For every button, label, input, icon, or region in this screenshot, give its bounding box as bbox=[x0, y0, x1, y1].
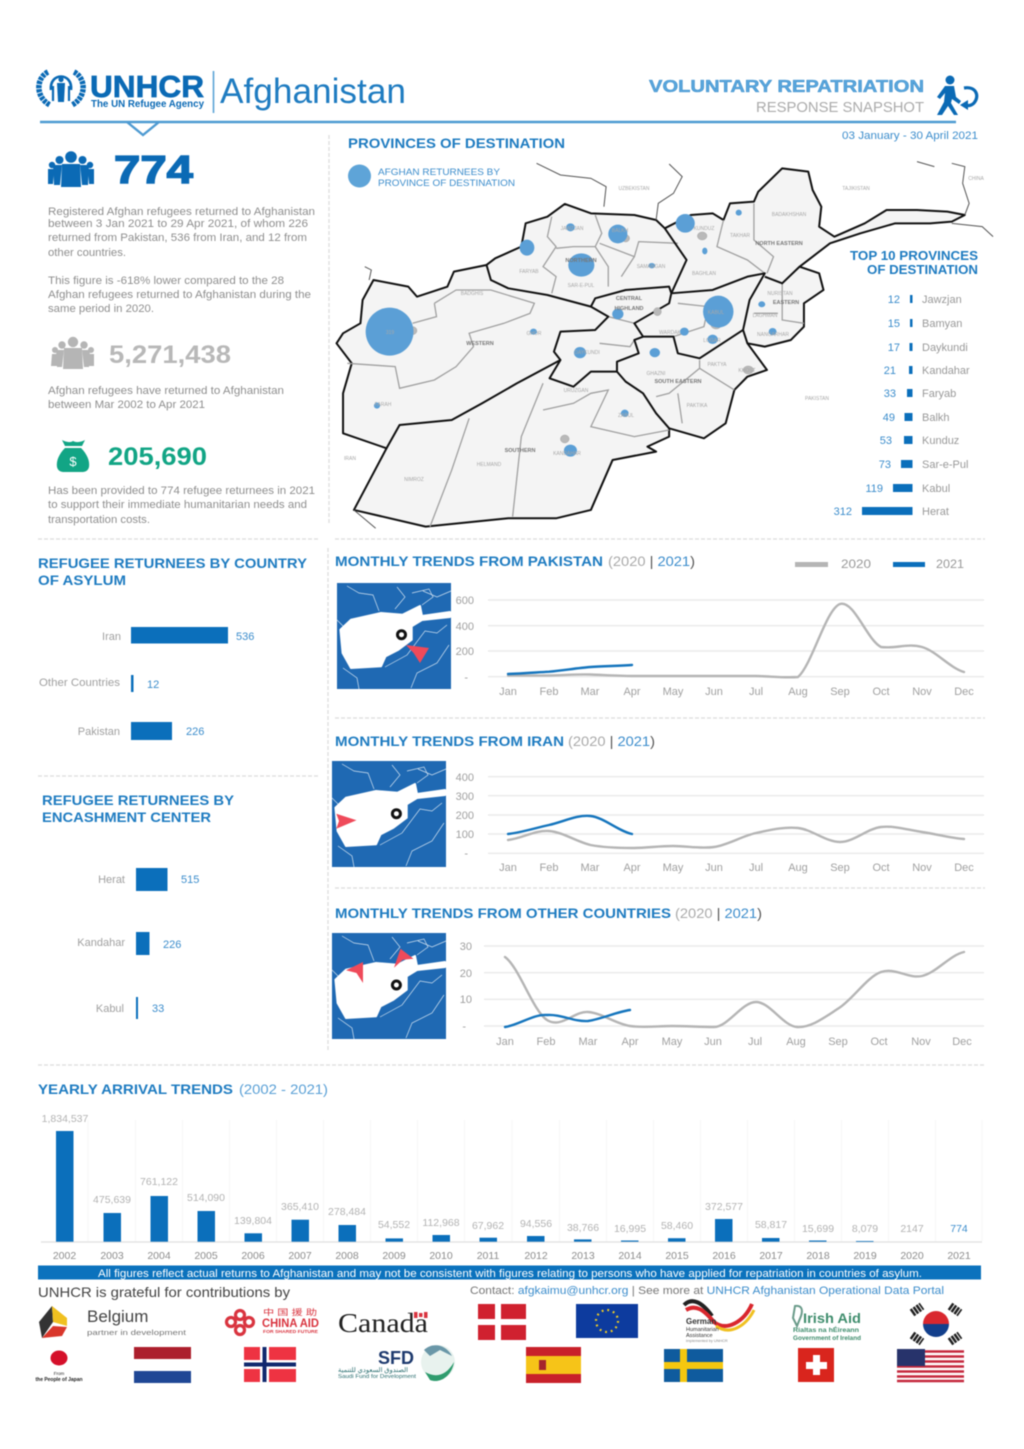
bar: Kandahar: Kandahar bbox=[77, 937, 125, 949]
heading: yearly arrival trends bbox=[38, 1081, 328, 1097]
line chart: other countries: 30 bbox=[460, 941, 472, 953]
icon: money bag: $ bbox=[69, 454, 77, 469]
line chart: Iran: Apr bbox=[623, 862, 641, 874]
logo wordmark: UNHCR bbox=[90, 69, 204, 104]
line chart: Iran: Feb bbox=[540, 862, 558, 874]
line chart: Iran: - bbox=[464, 848, 468, 860]
bar: Herat bbox=[98, 868, 199, 891]
line chart: other countries: Aug bbox=[786, 1036, 806, 1048]
line chart: Iran: 400 bbox=[456, 772, 474, 784]
bars: top 10 provinces: Sar-e-Pul bbox=[922, 459, 968, 471]
line chart: other countries: May bbox=[662, 1036, 683, 1048]
bars: top 10 provinces: Jawzjan bbox=[922, 294, 962, 306]
icon: group of people blue bbox=[48, 151, 94, 187]
map labels: NORTH EASTERN bbox=[755, 241, 803, 247]
logo: China Aid bbox=[226, 1307, 319, 1334]
panel: provinces of destination map bbox=[337, 135, 993, 528]
map legend: PROVINCE OF DESTINATION bbox=[378, 178, 515, 189]
text block: cash grant: to support their immediate humanitarian needs and bbox=[48, 499, 307, 511]
contributions heading: UNHCR is grateful for contributions by bbox=[38, 1284, 290, 1300]
logo: Saudi Fund for Development: SFD bbox=[378, 1348, 414, 1368]
logo: Saudi Fund for Development: Saudi Fund for Development bbox=[338, 1374, 417, 1380]
bar: Kabul: Kabul bbox=[96, 1003, 124, 1015]
text block: total returnees: Afghan refugees have returned to Afghanistan bbox=[48, 385, 284, 397]
map labels: ZABUL bbox=[618, 413, 634, 419]
logo: German Humanitarian Assistance bbox=[684, 1301, 754, 1343]
bubbles: returnees by province bbox=[366, 210, 777, 457]
text block: cash grant: Has been provided to 774 refugee returnees in 2021 bbox=[48, 485, 315, 497]
line chart: Pakistan: Oct bbox=[872, 686, 890, 698]
icon: walking person with return arrow bbox=[937, 76, 977, 115]
bar chart: yearly arrivals: 2017 bbox=[759, 1250, 783, 1262]
map labels: KHOST bbox=[738, 368, 756, 374]
bars: top 10 provinces: 119 bbox=[865, 483, 883, 495]
bars: top 10 provinces: 21 bbox=[884, 365, 896, 377]
map labels: IRAN bbox=[344, 456, 356, 462]
line chart: other countries: Jun bbox=[704, 1036, 722, 1048]
flag: Switzerland bbox=[798, 1348, 834, 1382]
bar chart: yearly arrivals: 2009 bbox=[382, 1250, 406, 1262]
bar chart: yearly arrivals: 2008 bbox=[335, 1250, 359, 1262]
line chart: Pakistan bbox=[456, 595, 984, 698]
map labels: FARAH bbox=[375, 402, 392, 408]
panel: yearly arrival trends bbox=[38, 1081, 982, 1262]
logo: Irish Aid: Rialtas na hÉireann bbox=[793, 1326, 859, 1334]
map labels: BADGHIS bbox=[461, 291, 484, 297]
panel: key figures bbox=[48, 149, 315, 526]
line chart: Pakistan: Feb bbox=[540, 686, 558, 698]
bar chart: yearly arrivals: 365,410 bbox=[281, 1201, 319, 1213]
bar chart: yearly arrivals: 514,090 bbox=[187, 1192, 225, 1204]
bar chart: yearly arrivals: 112,968 bbox=[422, 1217, 460, 1229]
bars: top 10 provinces: Kandahar bbox=[922, 365, 970, 377]
logo: Japan: From bbox=[54, 1371, 64, 1376]
locator map: Iran bbox=[332, 761, 446, 867]
header rule with chevron bbox=[40, 122, 956, 135]
line chart: other countries: Jan bbox=[496, 1036, 514, 1048]
flag: United States bbox=[897, 1349, 964, 1382]
logo: Saudi Fund for Development bbox=[338, 1345, 455, 1381]
bar: Iran bbox=[102, 627, 254, 644]
bar chart: yearly arrivals: 475,639 bbox=[93, 1194, 131, 1206]
logo: German Humanitarian Assistance: Assistance bbox=[686, 1333, 713, 1339]
bar chart: yearly arrivals: 139,804 bbox=[234, 1215, 272, 1227]
map labels: HELMAND bbox=[477, 462, 502, 468]
bar: other countries: 12 bbox=[147, 679, 159, 691]
map labels: GHAZNI bbox=[647, 371, 665, 377]
logo: Irish Aid: Government of Ireland bbox=[793, 1336, 861, 1342]
heading: country of asylum: OF ASYLUM bbox=[38, 572, 126, 588]
map labels: SAR-E-PUL bbox=[568, 283, 595, 289]
logo: Belgium: partner in development bbox=[87, 1328, 187, 1337]
heading: Pakistan trends bbox=[335, 553, 695, 569]
map labels: JAWZJAN bbox=[561, 226, 584, 232]
line chart: Iran: Jun bbox=[705, 862, 723, 874]
bars: top 10 provinces: Kabul bbox=[922, 483, 950, 495]
line chart: Iran: Jul bbox=[749, 862, 763, 874]
bar chart: yearly arrivals: 2016 bbox=[712, 1250, 736, 1262]
text block: cash grant: transportation costs. bbox=[48, 514, 150, 526]
line chart: Iran: Dec bbox=[954, 862, 974, 874]
map labels: WESTERN bbox=[466, 341, 494, 347]
map labels: BADAKHSHAN bbox=[772, 212, 807, 218]
bar chart: yearly arrivals: 2013 bbox=[571, 1250, 595, 1262]
bar chart: yearly arrivals: 774 bbox=[950, 1223, 968, 1235]
text block: total returnees: between Mar 2002 to Apr 2021 bbox=[48, 399, 205, 411]
panel: monthly trends from Pakistan bbox=[335, 553, 984, 698]
chart legend bbox=[795, 557, 964, 571]
locator map: other countries bbox=[332, 933, 446, 1039]
bar chart: yearly arrivals: 8,079 bbox=[852, 1223, 878, 1235]
bar chart: yearly arrivals: 16,995 bbox=[614, 1223, 646, 1235]
bar: Pakistan: 226 bbox=[186, 726, 204, 738]
logo: Japan bbox=[36, 1350, 82, 1383]
logo: China Aid: FOR SHARED FUTURE bbox=[263, 1329, 318, 1334]
map labels: BALKH bbox=[612, 228, 629, 234]
line chart: Pakistan: 600 bbox=[456, 595, 474, 607]
flag: Denmark bbox=[478, 1304, 526, 1340]
logo tagline: The UN Refugee Agency bbox=[91, 99, 204, 110]
map labels: LOGAR bbox=[703, 338, 721, 344]
line chart: Pakistan: - bbox=[464, 672, 468, 684]
heading: yearly arrival trends: YEARLY ARRIVAL TRENDS bbox=[38, 1081, 233, 1097]
bar chart: yearly arrivals: 2003 bbox=[100, 1250, 124, 1262]
line chart: Iran: Aug bbox=[788, 862, 808, 874]
bars: top 10 provinces: 49 bbox=[883, 412, 895, 424]
heading: other countries trends: (2020 | 2021) bbox=[675, 906, 762, 921]
map labels: NORTHERN bbox=[565, 258, 597, 264]
bar chart: yearly arrivals: 2019 bbox=[853, 1250, 877, 1262]
line chart: Iran: 200 bbox=[456, 810, 474, 822]
map legend bbox=[348, 164, 515, 189]
bars: top 10 provinces: 12 bbox=[888, 294, 900, 306]
map labels: KANDAHAR bbox=[553, 451, 581, 457]
bar chart: yearly arrivals: 94,556 bbox=[520, 1218, 552, 1230]
donor logos bbox=[36, 1301, 964, 1383]
icon: group of people grey bbox=[51, 337, 94, 369]
bars: top 10 provinces bbox=[834, 294, 970, 518]
logo: German Humanitarian Assistance: Humanitarian bbox=[686, 1327, 719, 1333]
bars: top 10 provinces: Kunduz bbox=[922, 435, 959, 447]
logo: Belgium bbox=[39, 1306, 187, 1338]
heading: country of asylum bbox=[38, 555, 308, 588]
map labels: PAKTYA bbox=[708, 362, 727, 368]
bar: Kandahar bbox=[77, 932, 181, 955]
logo: Irish Aid: Irish Aid bbox=[803, 1310, 861, 1326]
line chart: Iran: Oct bbox=[872, 862, 890, 874]
map legend: AFGHAN RETURNEES BY bbox=[378, 167, 501, 178]
disclaimer banner: All figures reflect actual returns to Afghanistan and may not be consistent with figures relating to persons who have applied for repatriation in countries of asylum. bbox=[98, 1268, 922, 1280]
text block: comparison: same period in 2020. bbox=[48, 303, 154, 315]
map labels: PAKTIKA bbox=[687, 403, 708, 409]
bar: Pakistan: Pakistan bbox=[78, 726, 120, 738]
line chart: Pakistan: Jan bbox=[499, 686, 517, 698]
panel: returnees by country of asylum bbox=[38, 555, 308, 740]
logo: Saudi Fund for Development: الصندوق السعودي للتنمية bbox=[338, 1366, 408, 1374]
bar: Pakistan bbox=[78, 722, 204, 740]
bars: top 10 provinces: 33 bbox=[884, 388, 896, 400]
map labels: HIGHLAND bbox=[614, 306, 644, 312]
locator map: Pakistan bbox=[337, 583, 451, 689]
heading: yearly arrival trends: (2002 - 2021) bbox=[239, 1082, 328, 1097]
line chart: Iran: Nov bbox=[912, 862, 932, 874]
text block: comparison bbox=[48, 275, 311, 315]
text block: cash grant bbox=[48, 485, 315, 526]
heading: country of asylum: REFUGEE RETURNEES BY COUNTRY bbox=[38, 555, 308, 571]
figure: 5,271,438: 5,271,438 bbox=[109, 341, 231, 369]
line chart: Iran bbox=[456, 772, 984, 874]
bar chart: yearly arrivals: 1,834,537 bbox=[42, 1113, 89, 1125]
panel: top 10 provinces bbox=[834, 248, 978, 518]
bar chart: yearly arrivals: 54,552 bbox=[378, 1219, 410, 1231]
line chart: Iran: 300 bbox=[456, 791, 474, 803]
bar chart: yearly arrivals: 15,699 bbox=[802, 1223, 834, 1235]
line chart: other countries: Oct bbox=[870, 1036, 888, 1048]
heading: Iran trends: (2020 | 2021) bbox=[568, 734, 655, 749]
line chart: Pakistan: Sep bbox=[830, 686, 850, 698]
map labels: PAKISTAN bbox=[805, 396, 829, 402]
line chart: Pakistan: 400 bbox=[456, 621, 474, 633]
flag: Spain bbox=[526, 1347, 581, 1383]
map labels: CHINA bbox=[968, 176, 984, 182]
bar: other countries bbox=[39, 675, 159, 692]
line chart: Pakistan: Dec bbox=[954, 686, 974, 698]
bars: top 10 provinces: Balkh bbox=[922, 412, 950, 424]
line chart: Iran: Mar bbox=[581, 862, 600, 874]
text block: registered returnees: returned from Pakistan, 536 from Iran, and 12 from bbox=[48, 232, 307, 244]
line chart: Pakistan: Mar bbox=[581, 686, 600, 698]
text block: comparison: Afghan refugees returned to Afghanistan during the bbox=[48, 289, 311, 301]
logo: Canada: Canada bbox=[338, 1308, 428, 1338]
panel: monthly trends from other countries bbox=[332, 905, 984, 1048]
bars: top 10 provinces: Faryab bbox=[922, 388, 956, 400]
map labels: KABUL bbox=[708, 310, 724, 316]
map labels: EASTERN bbox=[773, 300, 799, 306]
bar chart: yearly arrivals: 2002 bbox=[53, 1250, 76, 1262]
flag: Netherlands bbox=[134, 1347, 191, 1383]
country title: Afghanistan bbox=[220, 72, 406, 111]
logo: German Humanitarian Assistance: implemented by UNHCR bbox=[686, 1339, 728, 1343]
map labels: NANGARHAR bbox=[757, 332, 789, 338]
map labels: URUZGAN bbox=[564, 388, 589, 394]
text block: registered returnees: between 3 Jan 2021 to 29 Apr 2021, of whom 226 bbox=[48, 218, 308, 230]
line chart: Pakistan: May bbox=[663, 686, 684, 698]
logo: China Aid: CHINA AID bbox=[262, 1318, 319, 1330]
heading: encashment center: REFUGEE RETURNEES BY bbox=[42, 792, 235, 808]
line chart: Pakistan: Jun bbox=[705, 686, 723, 698]
report title: VOLUNTARY REPATRIATION bbox=[649, 76, 924, 96]
bar chart: yearly arrivals: 2007 bbox=[288, 1250, 312, 1262]
header: UNHCR logo and country title bbox=[39, 69, 406, 113]
logo: Belgium: Belgium bbox=[87, 1307, 148, 1326]
bars: top 10 provinces: 17 bbox=[888, 342, 900, 354]
map labels: BAGHLAN bbox=[692, 271, 716, 277]
heading: encashment center: ENCASHMENT CENTER bbox=[42, 809, 211, 825]
map labels: CENTRAL bbox=[616, 296, 643, 302]
map labels: SOUTH EASTERN bbox=[654, 379, 702, 385]
line chart: Pakistan: 200 bbox=[456, 646, 474, 658]
panel: returnees by encashment center bbox=[42, 792, 235, 1019]
text block: registered returnees: Registered Afghan refugees returned to Afghanistan bbox=[48, 206, 315, 218]
map labels: GHOR bbox=[526, 331, 542, 337]
bar chart: yearly arrivals: 38,766 bbox=[567, 1222, 599, 1234]
line chart: Pakistan: Nov bbox=[912, 686, 932, 698]
header: report type bbox=[649, 76, 977, 116]
line chart: Iran: May bbox=[663, 862, 684, 874]
text block: comparison: This figure is -618% lower compared to the 28 bbox=[48, 275, 284, 287]
flag: Sweden bbox=[664, 1349, 723, 1382]
report subtitle: RESPONSE SNAPSHOT bbox=[756, 99, 924, 116]
icon: money bag bbox=[57, 440, 89, 472]
line chart: Iran: Sep bbox=[830, 862, 850, 874]
chart legend: 2020 bbox=[841, 557, 871, 571]
bar chart: yearly arrivals: 2018 bbox=[806, 1250, 830, 1262]
line chart: other countries: Jul bbox=[748, 1036, 762, 1048]
map labels: NURISTAN bbox=[767, 291, 793, 297]
map labels: KUNDUZ bbox=[694, 226, 714, 232]
map labels: NIMROZ bbox=[404, 477, 424, 483]
bar: Kabul bbox=[96, 997, 164, 1019]
logo: Irish Aid bbox=[793, 1306, 861, 1342]
line chart: other countries: Mar bbox=[579, 1036, 598, 1048]
line chart: other countries: Feb bbox=[537, 1036, 555, 1048]
country shape bbox=[337, 168, 965, 527]
logo: China Aid: 中 国 援 助 bbox=[263, 1307, 317, 1317]
map labels: DAYKUNDI bbox=[574, 350, 600, 356]
map labels: SAMANGAN bbox=[637, 264, 666, 270]
line chart: Pakistan: Aug bbox=[788, 686, 808, 698]
heading: top 10 provinces: TOP 10 PROVINCES bbox=[850, 248, 978, 263]
line chart: other countries: - bbox=[462, 1021, 466, 1033]
bar: Herat: Herat bbox=[98, 874, 125, 886]
logo: Japan: the People of Japan bbox=[36, 1377, 82, 1383]
bar: other countries: Other Countries bbox=[39, 677, 121, 689]
map labels: 319 bbox=[386, 330, 394, 336]
logo: German Humanitarian Assistance: German bbox=[686, 1317, 716, 1326]
line chart: Pakistan: Apr bbox=[623, 686, 641, 698]
line chart: other countries: 20 bbox=[460, 968, 472, 980]
heading: Pakistan trends: (2020 | 2021) bbox=[608, 554, 695, 569]
bar chart: yearly arrivals: 67,962 bbox=[472, 1220, 504, 1232]
bar chart: yearly arrivals: 2014 bbox=[618, 1250, 642, 1262]
icon: UNHCR emblem bbox=[39, 72, 83, 105]
heading: top 10 provinces bbox=[850, 248, 978, 277]
bar: Iran: 536 bbox=[236, 631, 254, 643]
bar chart: yearly arrivals bbox=[41, 1113, 982, 1262]
bar chart: yearly arrivals: 2021 bbox=[947, 1250, 971, 1262]
map labels bbox=[344, 176, 984, 483]
flag: European Union bbox=[576, 1304, 638, 1338]
line chart: other countries: Sep bbox=[828, 1036, 848, 1048]
map labels: TAKHAR bbox=[730, 233, 750, 239]
text block: total returnees bbox=[48, 385, 284, 411]
bar chart: yearly arrivals: 2020 bbox=[900, 1250, 924, 1262]
bar: Kandahar: 226 bbox=[163, 939, 181, 951]
bars: top 10 provinces: Herat bbox=[922, 506, 949, 518]
map labels: TAJIKISTAN bbox=[842, 186, 870, 192]
line chart: Pakistan: Jul bbox=[749, 686, 763, 698]
bars: top 10 provinces: 73 bbox=[879, 459, 891, 471]
line chart: Iran: Jan bbox=[499, 862, 517, 874]
heading: top 10 provinces: OF DESTINATION bbox=[867, 262, 978, 277]
line chart: other countries: Dec bbox=[952, 1036, 972, 1048]
line chart: other countries: Apr bbox=[621, 1036, 639, 1048]
bar chart: yearly arrivals: 2015 bbox=[665, 1250, 689, 1262]
line chart: other countries: Nov bbox=[911, 1036, 931, 1048]
map labels: UZBEKISTAN bbox=[618, 186, 650, 192]
bars: top 10 provinces: 15 bbox=[888, 318, 900, 330]
text block: registered returnees: other countries. bbox=[48, 247, 126, 259]
bar chart: yearly arrivals: 2005 bbox=[194, 1250, 218, 1262]
bar: Kabul: 33 bbox=[152, 1003, 164, 1015]
bar chart: yearly arrivals: 761,122 bbox=[140, 1176, 178, 1188]
bar chart: yearly arrivals: 58,817 bbox=[755, 1219, 787, 1231]
line chart: other countries bbox=[460, 941, 984, 1048]
flag: Norway bbox=[244, 1347, 296, 1382]
bar chart: yearly arrivals: 2147 bbox=[900, 1223, 924, 1235]
bar chart: yearly arrivals: 2010 bbox=[429, 1250, 453, 1262]
flag: Republic of Korea bbox=[912, 1306, 960, 1342]
bar chart: yearly arrivals: 2012 bbox=[524, 1250, 548, 1262]
bars: top 10 provinces: Daykundi bbox=[922, 342, 968, 354]
map labels: WARDAK bbox=[659, 330, 682, 336]
bar chart: yearly arrivals: 2011 bbox=[477, 1250, 499, 1262]
bars: top 10 provinces: 53 bbox=[880, 435, 892, 447]
heading: Pakistan trends: MONTHLY TRENDS FROM PAKISTAN bbox=[335, 553, 603, 569]
heading: provinces of destination: PROVINCES OF DESTINATION bbox=[348, 135, 565, 151]
heading: other countries trends: MONTHLY TRENDS FROM OTHER COUNTRIES bbox=[335, 905, 671, 921]
text block: registered returnees bbox=[48, 206, 315, 259]
figure: 774: 774 bbox=[114, 149, 193, 192]
bar: Iran: Iran bbox=[102, 631, 121, 643]
bar: Herat: 515 bbox=[181, 874, 199, 886]
bars: top 10 provinces: Bamyan bbox=[922, 318, 962, 330]
heading: encashment center bbox=[42, 792, 235, 825]
bar chart: yearly arrivals: 2006 bbox=[241, 1250, 265, 1262]
bar chart: yearly arrivals: 278,484 bbox=[328, 1206, 366, 1218]
heading: Iran trends bbox=[335, 733, 655, 749]
map labels: FARYAB bbox=[519, 269, 539, 275]
line chart: other countries: 10 bbox=[460, 994, 472, 1006]
figure: 205,690: 205,690 bbox=[108, 443, 207, 471]
bar chart: yearly arrivals: 372,577 bbox=[705, 1201, 743, 1213]
contact line: Contact: afgkaimu@unhcr.org | See more at UNHCR Afghanistan Operational Data Portal bbox=[470, 1285, 944, 1297]
date range: 03 January - 30 April 2021 bbox=[842, 130, 978, 142]
bar chart: yearly arrivals: 58,460 bbox=[661, 1220, 693, 1232]
map labels: LAGHMAN bbox=[753, 313, 778, 319]
disclaimer banner bbox=[38, 1266, 981, 1280]
bars: top 10 provinces: 312 bbox=[834, 506, 852, 518]
map of Afghanistan bbox=[337, 162, 993, 528]
heading: Iran trends: MONTHLY TRENDS FROM IRAN bbox=[335, 733, 564, 749]
line chart: Iran: 100 bbox=[456, 829, 474, 841]
bar chart: yearly arrivals: 2004 bbox=[147, 1250, 171, 1262]
panel: monthly trends from Iran bbox=[332, 733, 984, 874]
map labels: SOUTHERN bbox=[505, 448, 535, 454]
chart legend: 2021 bbox=[936, 557, 964, 571]
